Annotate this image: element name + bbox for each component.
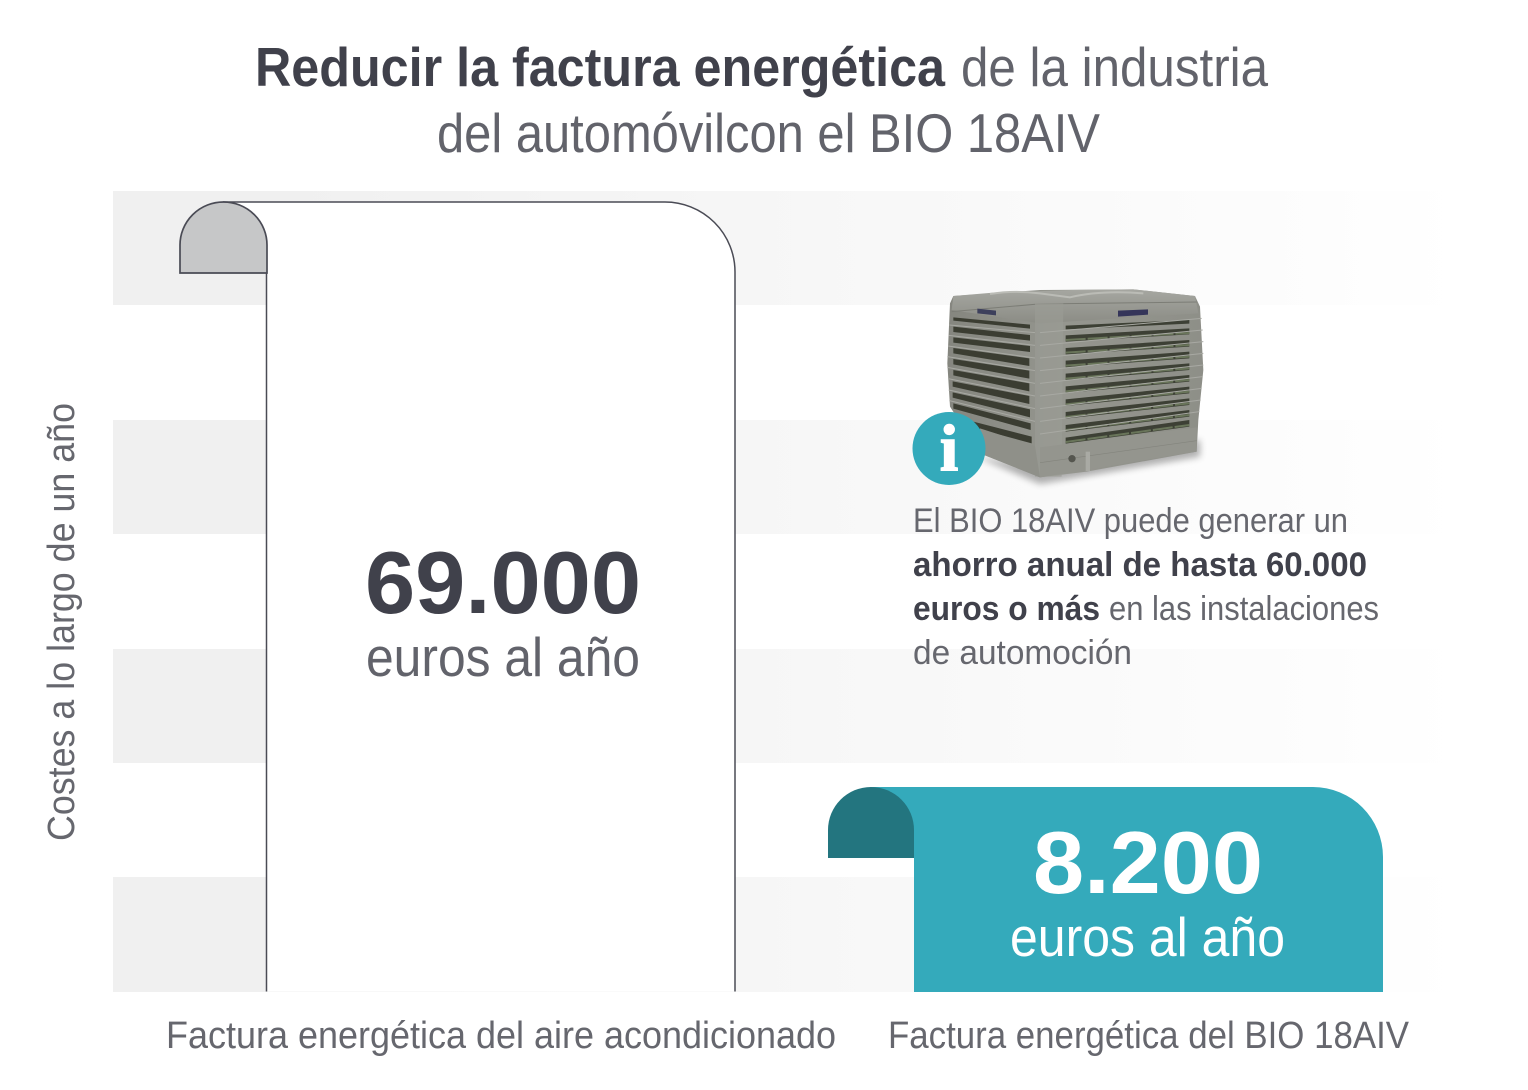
base [980,428,1040,477]
lid [952,289,1198,323]
bar body [223,202,735,992]
louvre media [1066,333,1189,442]
axis label: air conditioning: Factura energética del aire acondicionado [166,1015,836,1057]
product image: BIO 18AIV cooler [947,289,1203,484]
bar: air conditioning [180,202,735,992]
bar outline [223,202,735,992]
unit: euros al año: euros al año [366,626,640,688]
title: del automóvilcon el BIO 18AIV [437,102,1100,164]
background grid stripes [113,191,1460,992]
callout text: euros o más [913,590,1100,628]
bar body [872,787,1383,992]
axis label: BIO 18AIV: Factura energética del BIO 18AIV [888,1015,1410,1057]
bar curl [828,787,914,858]
title [255,36,1268,164]
icon: info: i [940,412,958,485]
bar curl [180,202,267,273]
callout text: ahorro anual de hasta 60.000 [913,546,1367,584]
bar: BIO 18AIV [828,787,1383,992]
value: 69.000: 69.000 [365,533,641,632]
callout text: en las instalaciones [1109,590,1379,628]
title: de la industria [961,36,1268,98]
left face louvres [953,317,1032,443]
callout text: de automoción [913,634,1132,672]
louvre ribs [947,318,1203,434]
right face louvres [1066,320,1189,444]
badges [977,309,996,315]
title: Reducir la factura energética [255,36,945,98]
y axis label: Costes a lo largo de un año [41,403,83,841]
icon: info [912,412,986,485]
shadow [977,440,1200,484]
callout text: El BIO 18AIV puede generar un [913,502,1348,540]
callout text [913,502,1379,672]
value: 8.200: 8.200 [1033,813,1263,912]
unit: euros al año: euros al año [1010,906,1285,968]
